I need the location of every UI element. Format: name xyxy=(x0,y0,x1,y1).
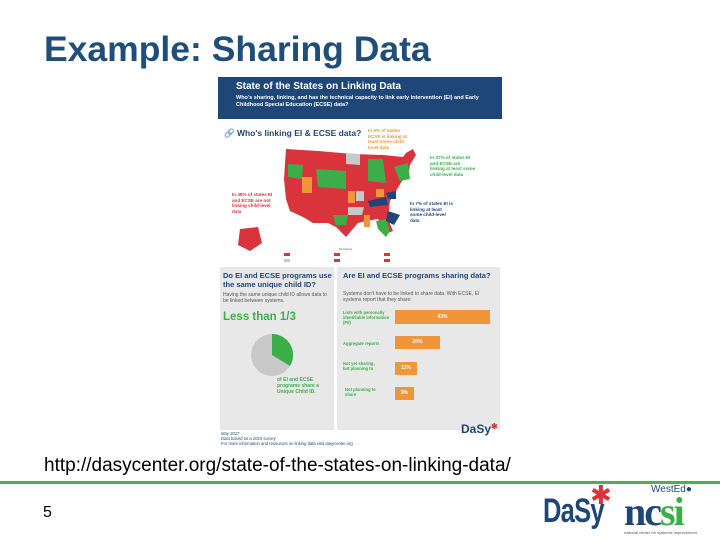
panel: unique child ID: Having the same unique child ID allows data to be linked between systems. xyxy=(223,292,327,304)
panel: sharing data bar chart: 20% xyxy=(412,339,422,345)
panel: sharing data bar chart: Lists with personally identifiable information (PII) xyxy=(343,310,389,325)
page number: 5 xyxy=(43,504,52,521)
footer note: For more information and resources on linking data visit dasycenter.org xyxy=(221,441,353,446)
title: Example: Sharing Data xyxy=(44,29,431,69)
header bar: Who's sharing, linking, and has the technical capacity to link early intervention (EI) and Early Childhood Special Education (ECSE) data? xyxy=(236,95,479,108)
panel: sharing data bar chart: Not yet sharing, xyxy=(343,361,375,366)
small DaSy logo: DaSy✱ xyxy=(461,422,498,436)
footer note xyxy=(221,431,353,446)
header bar xyxy=(218,77,502,119)
DaSy logo: DaSy xyxy=(543,492,604,530)
panel: unique child ID: Less than 1/3 xyxy=(223,311,296,323)
footer note: May 2017 xyxy=(221,431,239,436)
logos: national center for systemic improvement xyxy=(624,530,697,535)
panel: sharing data bar chart: Not planning to xyxy=(345,387,376,392)
map section: In 48% of states EI and ECSE are not linking child-level data xyxy=(232,192,272,214)
panel: unique child ID: Do EI and ECSE programs use the same unique child ID? xyxy=(223,271,332,289)
panel: sharing data bar chart: Are EI and ECSE programs sharing data? xyxy=(343,271,491,280)
panel: sharing data bar chart: 43% xyxy=(437,314,448,320)
header bar: State of the States on Linking Data xyxy=(236,81,401,92)
panel: sharing data bar chart: but planning to xyxy=(343,366,373,371)
map xyxy=(238,149,416,251)
panel: unique child ID: of EI and ECSE programs share a Unique Child ID. xyxy=(277,377,319,395)
map section xyxy=(224,128,475,262)
panel: sharing data bar chart: 9% xyxy=(401,390,408,396)
panel: sharing data bar chart: share xyxy=(345,392,356,397)
pie chart xyxy=(251,334,294,376)
callouts: In 9% of states ECSE is linking at least some child-level data xyxy=(368,128,407,150)
logos xyxy=(543,480,697,535)
infographic xyxy=(218,77,502,447)
panel: sharing data bar chart: Systems don't have to be linked to share data. With ECSE, EI systems report that they share: xyxy=(343,291,479,303)
url text: http://dasycenter.org/state-of-the-states-on-linking-data/ xyxy=(44,455,511,476)
panel: sharing data bar chart: Aggregate reports xyxy=(343,341,379,346)
map heading: 🔗 Who's linking EI & ECSE data? xyxy=(224,128,361,138)
logos: WestEd● xyxy=(651,484,692,495)
map section: In 37% of states EI and ECSE are linking at least some child-level data xyxy=(430,155,475,176)
panel: unique child ID xyxy=(220,267,334,430)
footer note: Data based on a 2015 survey xyxy=(221,436,276,441)
panel: sharing data bar chart xyxy=(337,267,500,430)
map section: In 7% of states EI is linking at least some child-level data xyxy=(410,201,453,222)
icon: red flower: ✱ xyxy=(590,480,612,510)
panel: sharing data bar chart: 11% xyxy=(401,365,411,371)
legend: Territories xyxy=(339,247,352,251)
green divider line xyxy=(0,481,720,484)
NCSI logo: ncsi xyxy=(624,489,683,534)
